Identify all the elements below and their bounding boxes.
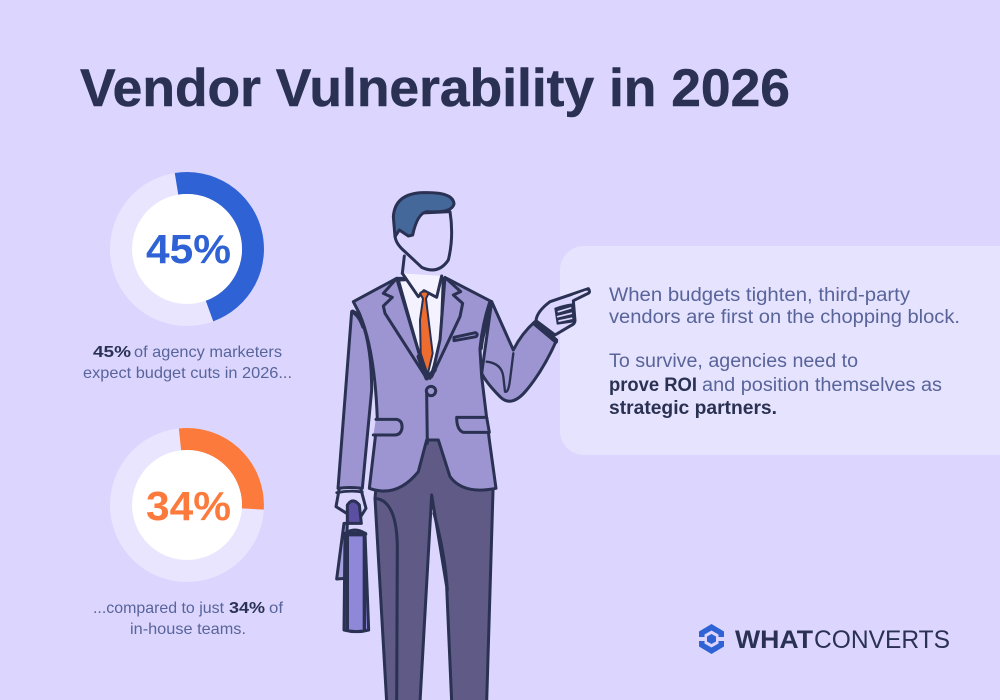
lower pockets xyxy=(373,417,489,435)
logo wordmark xyxy=(735,626,950,654)
arm fold xyxy=(487,353,513,392)
callout text: When budgets tighten, third-party xyxy=(609,285,911,306)
right arm raised xyxy=(482,302,557,401)
callout text xyxy=(609,285,960,419)
lapel fold xyxy=(419,357,435,378)
left lapel xyxy=(383,278,427,378)
donut chart: 34% xyxy=(121,439,253,571)
donut chart: 34%: 34% xyxy=(146,483,231,529)
caption: 34%: ...compared to just xyxy=(93,600,225,617)
donut chart: 45%: 45% xyxy=(146,226,231,272)
left sleeve xyxy=(338,312,372,488)
caption: 45% xyxy=(83,344,292,382)
callout text: strategic partners. xyxy=(609,398,777,419)
logo: WhatConverts xyxy=(699,624,950,654)
jacket button xyxy=(426,386,436,396)
callout text: To survive, agencies need to xyxy=(609,351,858,372)
hair xyxy=(393,193,454,237)
briefcase xyxy=(337,501,369,632)
caption: 45%: 45% xyxy=(93,344,131,361)
shirt xyxy=(398,278,443,378)
donut chart: 45% xyxy=(121,183,253,315)
caption: 45%: expect budget cuts in 2026... xyxy=(83,365,292,382)
jacket body xyxy=(353,278,496,491)
panel: callout xyxy=(560,246,1000,455)
logo wordmark: CONVERTS xyxy=(814,626,950,654)
callout text: prove ROI xyxy=(609,375,697,396)
neck xyxy=(402,256,404,273)
shoulder seams xyxy=(353,303,490,348)
title: Vendor Vulnerability in 2026 xyxy=(80,59,790,118)
logo icon xyxy=(699,624,724,654)
pointing hand xyxy=(534,289,589,342)
tie xyxy=(420,291,433,375)
panel: 34% stat xyxy=(93,439,284,638)
right lapel xyxy=(432,277,463,377)
illustration: businessman with briefcase xyxy=(336,193,589,700)
caption: 34%: in-house teams. xyxy=(130,621,246,638)
caption: 34%: of xyxy=(269,600,284,617)
trousers xyxy=(375,433,493,700)
hand holding briefcase xyxy=(336,488,366,517)
callout text: vendors are first on the chopping block. xyxy=(609,307,960,328)
collar xyxy=(402,273,442,297)
chest pocket xyxy=(454,333,477,341)
callout text: and position themselves as xyxy=(702,375,942,396)
face xyxy=(395,212,452,270)
panel: 45% stat xyxy=(83,183,292,382)
caption: 34%: 34% xyxy=(229,600,265,617)
logo wordmark: WHAT xyxy=(735,626,813,654)
caption: 34% xyxy=(93,600,284,638)
caption: 45%: of agency marketers xyxy=(134,344,282,361)
